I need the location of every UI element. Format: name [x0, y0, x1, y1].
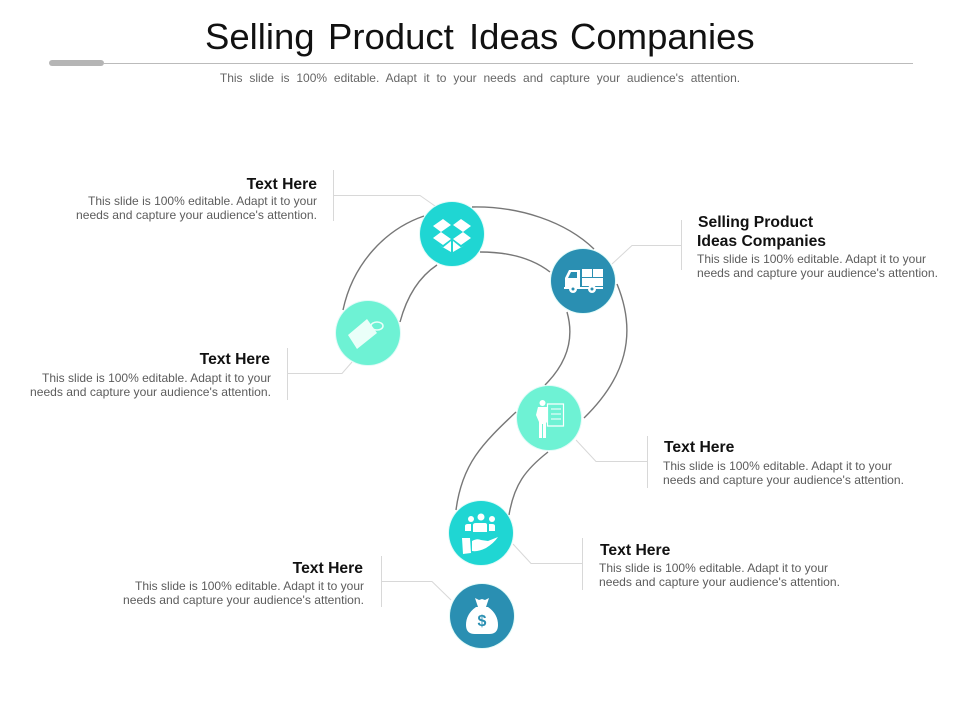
callout: lower left — [123, 556, 451, 607]
icon: delivery truck — [550, 248, 616, 314]
icon: price tag — [335, 300, 401, 366]
question mark outline — [343, 207, 627, 515]
callout: lower left: This slide is 100% editable. Adapt it to your — [135, 579, 364, 593]
icon: dropbox — [419, 201, 485, 267]
callout: middle right: needs and capture your audience's attention. — [663, 473, 904, 487]
callout: selling product ideas companies: This slide is 100% editable. Adapt it to your — [697, 252, 926, 266]
subtitle: This slide is 100% editable. Adapt it to your needs and capture your audience's attention. — [220, 71, 740, 85]
icon: money bag: $ — [478, 613, 487, 630]
callout: middle left: needs and capture your audience's attention. — [30, 385, 271, 399]
icon: people in hand — [448, 500, 514, 566]
callout: middle left — [30, 348, 352, 400]
callout: lower right — [513, 538, 840, 590]
title: Product — [328, 16, 454, 57]
icon: person with document — [516, 385, 582, 451]
callout: middle left: This slide is 100% editable. Adapt it to your — [42, 371, 271, 385]
header rule — [49, 60, 913, 66]
callout: lower left: needs and capture your audience's attention. — [123, 593, 364, 607]
callout: top left: This slide is 100% editable. Adapt it to your — [88, 194, 317, 208]
callout: middle left: Text Here — [200, 351, 270, 368]
callout: lower right: Text Here — [600, 542, 671, 559]
callout: lower left: Text Here — [293, 560, 363, 577]
callout: middle right: Text Here — [664, 439, 735, 456]
callout: middle right — [576, 436, 904, 488]
icon: money bag — [449, 583, 515, 649]
callout: lower right: This slide is 100% editable. Adapt it to your — [599, 561, 828, 575]
callout: selling product ideas companies: Selling Product — [698, 214, 814, 231]
title: Selling — [205, 16, 315, 57]
callout: lower right: needs and capture your audience's attention. — [599, 575, 840, 589]
callout: selling product ideas companies — [612, 214, 938, 280]
callout: selling product ideas companies: Ideas Companies — [697, 233, 826, 250]
callout: top left: needs and capture your audience's attention. — [76, 208, 317, 222]
callout: top left: Text Here — [247, 176, 317, 193]
callout: selling product ideas companies: needs and capture your audience's attention. — [697, 266, 938, 280]
callout: middle right: This slide is 100% editable. Adapt it to your — [663, 459, 892, 473]
title: Companies — [570, 16, 755, 57]
title: Ideas — [469, 16, 558, 57]
callout: top left — [76, 170, 435, 222]
